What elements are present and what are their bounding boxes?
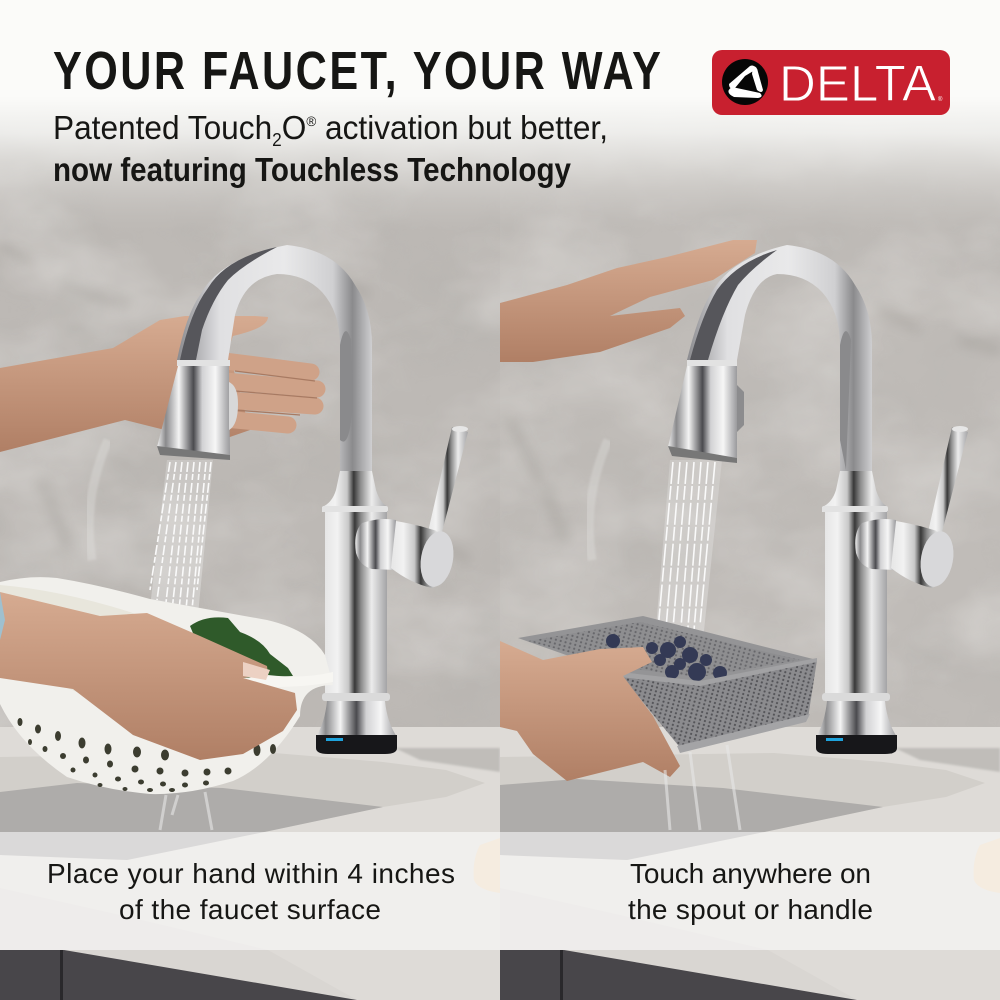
countertop (500, 727, 1000, 1000)
caption band: left (0, 832, 500, 950)
panel: left photo (0, 129, 500, 1000)
subtitle line: Patented Touch (53, 109, 282, 146)
subtitle line: activation but better, (316, 109, 608, 146)
spray water (655, 460, 722, 640)
water drips (160, 792, 212, 830)
mesh basket (518, 616, 817, 753)
spray water (149, 460, 213, 608)
logo: Delta (712, 50, 950, 115)
panel: right photo (500, 131, 1000, 1000)
arm and hand holding colander (0, 592, 297, 760)
subtitle line: O (282, 109, 306, 146)
faucet: left (157, 245, 468, 754)
caption: right: Touch anywhere on (630, 858, 871, 889)
counter front edge (500, 888, 857, 1000)
icon: Delta triangle mark (722, 59, 768, 105)
arm and hand touching spout (500, 240, 757, 362)
subtitle line: ® (306, 113, 317, 129)
caption: right: the spout or handle (628, 894, 873, 925)
arm and hand holding basket (500, 641, 680, 781)
caption: left: Place your hand within 4 inches (47, 858, 455, 889)
water drips (665, 745, 740, 830)
spinach leaves (190, 617, 293, 678)
wooden object (974, 838, 1000, 893)
logo: Delta: DELTA (779, 55, 936, 112)
wooden object (474, 838, 500, 893)
blueberries (606, 634, 727, 681)
header fade (0, 0, 1000, 230)
sink rim (500, 753, 984, 807)
title: YOUR FAUCET, YOUR WAY (53, 42, 661, 101)
counter front edge (0, 888, 357, 1000)
faucet: right (668, 245, 968, 754)
countertop (0, 727, 500, 1000)
logo: Delta: ® (938, 96, 943, 103)
colander (0, 577, 333, 794)
caption band: right (500, 832, 1000, 950)
caption: left: of the faucet surface (119, 894, 381, 925)
sink rim (0, 753, 484, 807)
sink basin (0, 783, 383, 860)
arm and hand reaching to faucet (0, 316, 317, 452)
subtitle bold line: now featuring Touchless Technology (53, 151, 572, 188)
subtitle line: 2 (272, 130, 282, 150)
sink basin (500, 779, 883, 860)
